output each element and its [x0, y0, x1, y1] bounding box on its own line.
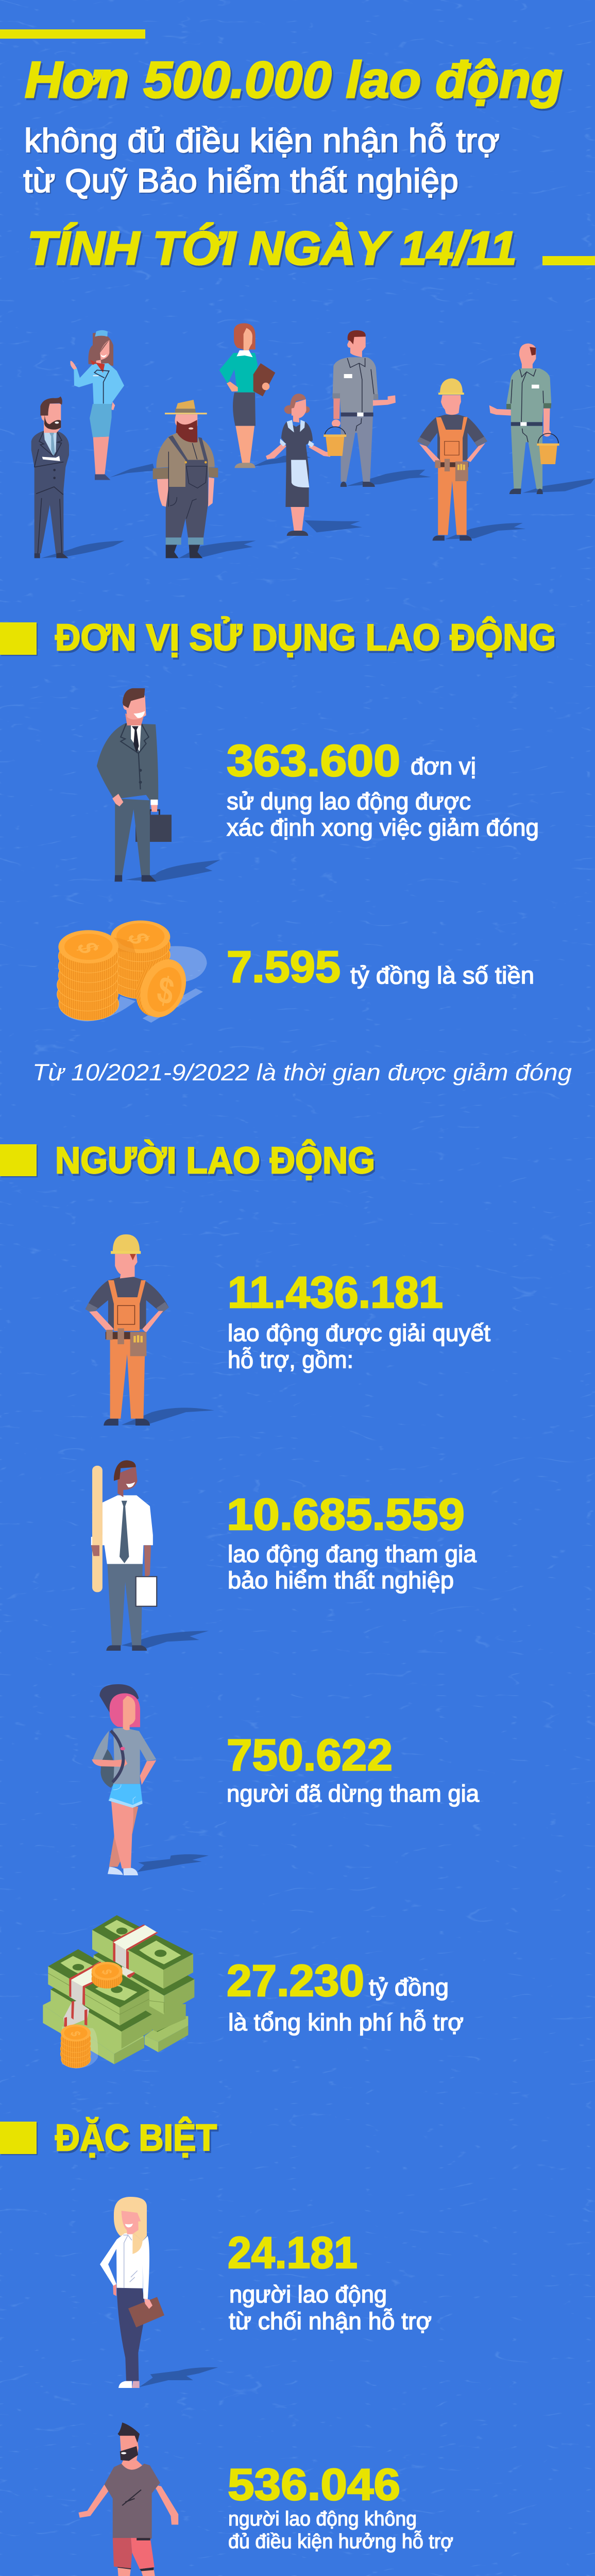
number: 27.230	[227, 1956, 364, 2006]
stat: 750.622	[227, 1731, 479, 1807]
heading: NGƯỜI LAO ĐỘNG	[55, 1140, 375, 1181]
icon: stacks of banknotes and coins: $	[98, 1968, 115, 1976]
number: 10.685.559	[227, 1490, 465, 1539]
figure: construction worker	[417, 378, 526, 540]
illustration: workers left group	[31, 323, 288, 558]
illustration: workers right group	[258, 330, 594, 540]
title block	[23, 51, 563, 275]
number: 11.436.181	[228, 1268, 443, 1317]
heading: ĐẶC BIỆT	[55, 2117, 217, 2159]
stat: 10.685.559	[227, 1490, 477, 1594]
number: 24.181	[228, 2228, 358, 2278]
description line 2: bảo hiểm thất nghiệp	[228, 1567, 454, 1594]
heading marker	[0, 622, 37, 655]
description line 2: đủ điều kiện hưởng hỗ trợ	[228, 2531, 453, 2553]
figure: farmer with hat	[153, 400, 256, 558]
stat: 536.046	[228, 2460, 453, 2553]
stat: 24.181	[228, 2228, 432, 2334]
description: là tổng kinh phí hỗ trợ	[228, 2009, 464, 2036]
icon: gold coin stacks	[57, 921, 207, 1024]
right accent bar	[542, 256, 595, 265]
description line 2: từ chối nhận hỗ trợ	[229, 2308, 432, 2334]
number: 536.046	[228, 2460, 400, 2510]
icon: engineer with blueprint roll	[91, 1460, 209, 1651]
heading marker	[0, 1144, 37, 1176]
icon: gold coin stacks: $	[70, 940, 107, 956]
note: reduction period: Từ 10/2021-9/2022 là thời gian được giảm đóng	[32, 1059, 572, 1086]
icon: stacks of banknotes and coins	[43, 1915, 194, 2069]
icon: blonde woman with folder	[100, 2197, 218, 2388]
description line 1: người lao động không	[228, 2508, 417, 2530]
number: 750.622	[227, 1731, 393, 1780]
stat: 11.436.181	[228, 1268, 490, 1373]
subtitle line 1: không đủ điều kiện nhận hỗ trợ	[24, 122, 500, 159]
figure: secretary with folder	[219, 323, 288, 468]
number: 363.600	[227, 736, 400, 786]
description line 1: lao động đang tham gia	[228, 1540, 477, 1567]
icon: young woman with backpack	[92, 1684, 209, 1875]
unit: tỷ đồng	[369, 1974, 449, 2001]
stat: 27.230	[227, 1956, 464, 2036]
icon: casual bearded man	[78, 2422, 216, 2576]
title line 1: Hơn 500.000 lao động	[25, 51, 563, 108]
figure: maid	[258, 394, 362, 536]
icon: businessman with briefcase	[97, 688, 220, 882]
description line 2: hỗ trợ, gồm:	[228, 1346, 353, 1373]
icon: gold coin stacks: $	[154, 967, 177, 1013]
description line 1: lao động được giải quyết	[228, 1319, 490, 1346]
stat: 363.600	[227, 736, 539, 841]
description line 1: người lao động	[229, 2281, 387, 2308]
section: special cases	[0, 2117, 453, 2576]
figure: flight attendant	[70, 330, 155, 480]
description: tỷ đồng là số tiền	[350, 962, 534, 989]
icon: construction worker	[86, 1234, 214, 1426]
top accent bar	[0, 29, 145, 39]
description: người đã dừng tham gia	[227, 1780, 479, 1807]
figure: green uniform man with bucket	[489, 344, 594, 494]
section: workers	[0, 1140, 490, 2069]
section: employers	[0, 617, 572, 1086]
heading: ĐƠN VỊ SỬ DỤNG LAO ĐỘNG	[55, 617, 556, 658]
number: 7.595	[227, 942, 341, 992]
subtitle line 2: từ Quỹ Bảo hiểm thất nghiệp	[23, 162, 458, 199]
stat: 7.595	[227, 942, 534, 992]
date line: TÍNH TỚI NGÀY 14/11	[27, 223, 517, 275]
description line 2: xác định xong việc giảm đóng	[227, 814, 539, 841]
unit: đơn vị	[411, 753, 476, 779]
heading marker	[0, 2122, 37, 2154]
description line 1: sử dụng lao động được	[227, 788, 471, 815]
figure: bearded businessman	[31, 396, 125, 558]
icon: stacks of banknotes and coins: $	[67, 2030, 84, 2038]
icon: gold coin stacks: $	[121, 931, 157, 946]
figure: grey uniform man with bucket	[324, 330, 431, 487]
